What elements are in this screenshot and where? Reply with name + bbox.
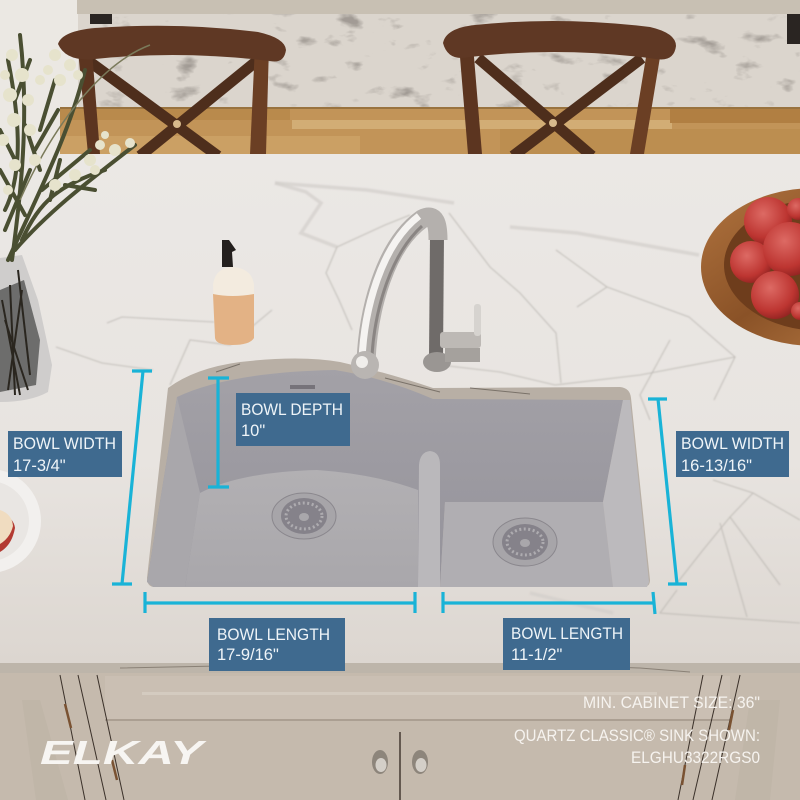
dimension: bowl depth (208, 378, 229, 487)
chair right (443, 21, 676, 156)
centre divider (418, 451, 440, 587)
note: sink model (514, 726, 760, 767)
plant and vase (0, 35, 150, 402)
label: left bowl width (8, 431, 122, 477)
plate with apple slice (0, 469, 41, 573)
label: right bowl length: 11-1/2" (511, 646, 563, 664)
label: left bowl length: 17-9/16" (217, 646, 279, 664)
note: sink model: ELGHU3322RGS0 (631, 748, 760, 767)
fruit bowl with apples (701, 188, 800, 346)
rim (147, 358, 650, 587)
right bowl floor (440, 502, 613, 587)
label: left bowl width: 17-3/4" (13, 457, 66, 475)
label: bowl depth (236, 393, 350, 446)
label: left bowl length: BOWL LENGTH (217, 626, 330, 644)
soap dispenser (213, 240, 254, 345)
logo plate (290, 385, 315, 389)
background rug and floor (0, 0, 800, 154)
sink basin (147, 358, 650, 587)
label: right bowl width: 16-13/16" (681, 457, 752, 475)
left bowl floor (185, 470, 418, 587)
label: right bowl width: BOWL WIDTH (681, 435, 784, 453)
left drain (272, 493, 336, 539)
label: left bowl width: BOWL WIDTH (13, 435, 116, 453)
dimension: left bowl width (112, 371, 152, 584)
cabinet (0, 665, 800, 800)
label: bowl depth: 10" (241, 422, 265, 440)
label: right bowl width (676, 431, 789, 477)
right wall (603, 400, 649, 587)
label: right bowl length: BOWL LENGTH (511, 625, 623, 643)
right drain (493, 518, 557, 566)
rim veins (216, 364, 530, 394)
note: sink model: QUARTZ CLASSIC® SINK SHOWN: (514, 726, 760, 745)
note: cabinet size: MIN. CABINET SIZE: 36" (583, 693, 760, 712)
dimension: right bowl length (443, 592, 655, 614)
faucet (351, 216, 481, 379)
marble countertop (0, 154, 800, 673)
label: right bowl length (503, 618, 630, 670)
chair left (58, 26, 286, 156)
logo: Elkay: ELKAY (40, 734, 207, 771)
label: bowl depth: BOWL DEPTH (241, 401, 343, 419)
cabinet handles (372, 750, 428, 774)
back and side walls (147, 370, 623, 587)
label: left bowl length (209, 618, 345, 671)
dimension: left bowl length (145, 592, 415, 613)
dimension: right bowl width (648, 399, 687, 584)
